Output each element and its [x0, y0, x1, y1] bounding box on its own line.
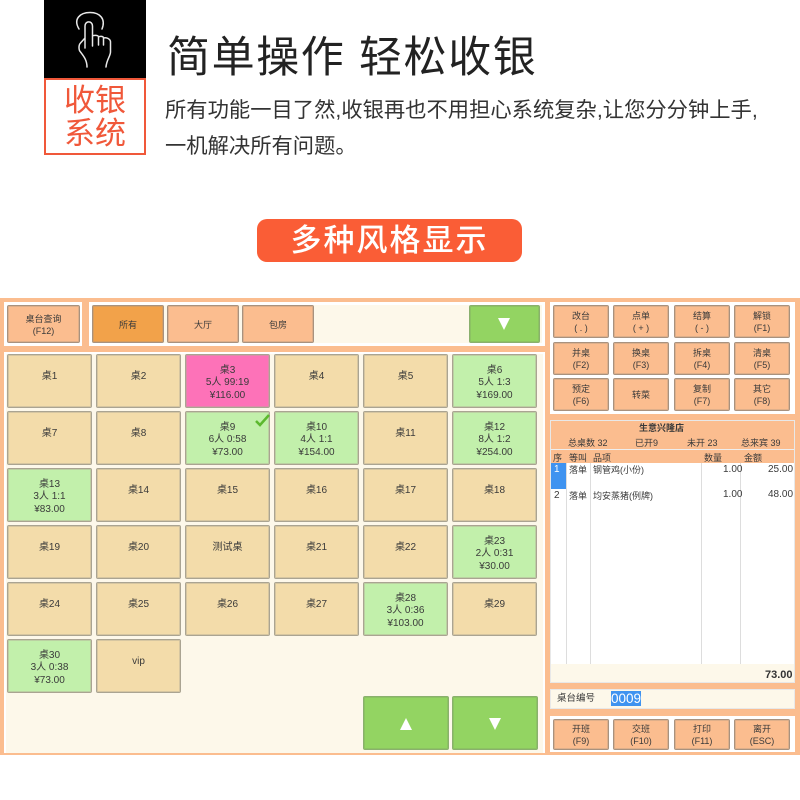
badge label: 收银: [64, 83, 126, 118]
table grid: ¥30.00: [479, 561, 510, 572]
table grid: 桌19: [39, 542, 60, 553]
badge label: 系统: [64, 116, 126, 151]
POS screen: [0, 298, 800, 755]
page up button: [363, 696, 449, 750]
function buttons: (F3): [633, 360, 649, 370]
table grid: 桌24: [39, 599, 60, 610]
table number input: 0009: [611, 691, 641, 706]
table grid: 桌7: [42, 428, 57, 439]
table grid: 桌29: [484, 599, 505, 610]
bottom buttons: [553, 719, 790, 750]
table grid: 桌4: [309, 371, 324, 382]
store summary: 总桌数 32: [568, 438, 608, 448]
function buttons: (F4): [694, 360, 710, 370]
function buttons: ( + ): [633, 323, 649, 333]
description: [165, 98, 758, 158]
table grid: 桌30: [39, 650, 60, 661]
table grid: 桌25: [128, 599, 149, 610]
table grid: ¥116.00: [210, 390, 245, 401]
table grid: ¥154.00: [298, 447, 335, 458]
table grid: 8人 1:2: [478, 434, 511, 445]
tab hall: 大厅: [194, 320, 212, 330]
bottom buttons: (F10): [630, 736, 652, 746]
order table: 等叫: [569, 453, 587, 463]
table grid: 5人 1:3: [478, 377, 511, 388]
table grid: 桌26: [217, 599, 238, 610]
table grid: 桌16: [306, 485, 327, 496]
icon: check mark: [255, 414, 270, 427]
table grid: 桌22: [395, 542, 416, 553]
order table: 钢管鸡(小份): [593, 465, 644, 475]
function buttons: (F5): [754, 360, 770, 370]
tab room: 包房: [269, 320, 287, 330]
order table: 1.00: [723, 464, 742, 475]
function buttons: (F6): [573, 396, 589, 406]
table grid: 桌12: [484, 422, 505, 433]
order table: 25.00: [768, 464, 793, 475]
function buttons: 转菜: [632, 390, 650, 400]
function buttons: 拆桌: [693, 348, 711, 358]
table grid: [7, 354, 537, 693]
tab room: [242, 305, 314, 343]
table grid: 3人 1:1: [33, 491, 66, 502]
bottom buttons: (F9): [573, 736, 589, 746]
section heading pill: 多种风格显示: [290, 223, 488, 258]
bottom buttons: (F11): [692, 736, 712, 746]
table grid: 桌8: [131, 428, 146, 439]
order table: 金额: [744, 453, 762, 463]
table grid: 2人 0:31: [476, 548, 513, 559]
table grid: 4人 1:1: [300, 434, 333, 445]
order table: 48.00: [768, 489, 793, 500]
table grid: 桌17: [395, 485, 416, 496]
table grid: 桌20: [128, 542, 149, 553]
order table: 落单: [569, 491, 587, 501]
table grid: 5人 99:19: [206, 377, 249, 388]
store summary: 未开 23: [687, 438, 718, 448]
order table: 1: [554, 464, 560, 475]
order receipt: [551, 423, 794, 681]
table grid: 测试桌: [212, 542, 242, 553]
table search button: (F12): [33, 326, 54, 336]
function buttons: ( . ): [574, 323, 588, 333]
table grid: 3人 0:36: [387, 605, 424, 616]
tab all: [92, 305, 164, 343]
order table: 均安蒸猪(例牌): [593, 491, 653, 501]
table grid: ¥73.00: [212, 447, 243, 458]
area tabs: [92, 305, 314, 343]
bottom buttons: (ESC): [750, 736, 774, 746]
function buttons: 改台: [572, 311, 590, 321]
table grid: 桌15: [217, 485, 238, 496]
function buttons: (F1): [754, 323, 770, 333]
function buttons: (F8): [754, 396, 770, 406]
tab hall: [167, 305, 239, 343]
store summary: 总来宾 39: [741, 438, 781, 448]
function buttons: 换桌: [632, 348, 650, 358]
store summary: 已开9: [635, 438, 658, 448]
function buttons: ( - ): [695, 323, 709, 333]
table grid: 桌11: [395, 428, 416, 439]
table grid: 桌18: [484, 485, 505, 496]
page down button: [452, 696, 538, 750]
table grid: 桌1: [42, 371, 57, 382]
badge label: [44, 78, 146, 155]
function buttons: [553, 305, 790, 411]
store summary: [551, 421, 794, 450]
function buttons: 预定: [572, 384, 590, 394]
function buttons: 解锁: [753, 311, 771, 321]
table grid: 桌21: [306, 542, 327, 553]
section heading pill: [257, 219, 522, 262]
table grid: 桌9: [220, 422, 235, 433]
order table: 落单: [569, 465, 587, 475]
table grid: 桌10: [306, 422, 327, 433]
table grid: vip: [132, 656, 145, 667]
tab all: 所有: [119, 320, 137, 330]
bottom buttons: 交班: [632, 724, 650, 734]
title: 简单操作 轻松收银: [167, 34, 537, 82]
function buttons: 清桌: [753, 348, 771, 358]
function buttons: 其它: [753, 384, 771, 394]
table grid: 桌13: [39, 479, 60, 490]
table grid: 桌5: [398, 371, 413, 382]
table grid: 桌6: [487, 365, 502, 376]
description: 一机解决所有问题。: [165, 134, 357, 158]
table grid: ¥83.00: [34, 504, 65, 515]
bottom buttons: 开班: [572, 724, 590, 734]
table grid: 桌27: [306, 599, 327, 610]
order table: [551, 453, 793, 681]
page down button top: [469, 305, 540, 343]
function buttons: (F2): [573, 360, 589, 370]
order table: 品项: [593, 453, 611, 463]
table grid: ¥103.00: [387, 618, 424, 629]
table grid: ¥254.00: [476, 447, 513, 458]
table number input: [557, 691, 641, 706]
store summary: 生意兴隆店: [639, 423, 684, 433]
table grid: 3人 0:38: [31, 662, 68, 673]
order table: 数量: [704, 453, 722, 463]
order table: 序: [553, 453, 562, 463]
order table: 2: [554, 490, 560, 501]
function buttons: 点单: [632, 311, 650, 321]
table search button: 桌台查询: [25, 314, 62, 324]
function buttons: 并桌: [572, 348, 590, 358]
table grid: 桌14: [128, 485, 149, 496]
table grid: 桌28: [395, 593, 416, 604]
table grid: 桌23: [484, 536, 505, 547]
table grid: ¥73.00: [34, 675, 65, 686]
table grid: 6人 0:58: [209, 434, 246, 445]
order table: 1.00: [723, 489, 742, 500]
table number input: 桌台编号: [557, 693, 595, 704]
logo badge: [44, 0, 146, 155]
order table: 73.00: [765, 669, 793, 681]
table search button: [7, 305, 80, 343]
table grid: 桌3: [220, 365, 235, 376]
icon: tapping hand: [44, 0, 146, 78]
table grid: ¥169.00: [476, 390, 513, 401]
bottom buttons: 离开: [753, 724, 771, 734]
bottom buttons: 打印: [693, 724, 711, 734]
function buttons: 复制: [693, 384, 711, 394]
function buttons: 结算: [693, 311, 711, 321]
description: 所有功能一目了然,收银再也不用担心系统复杂,让您分分钟上手,: [165, 98, 758, 122]
table grid: 桌2: [131, 371, 146, 382]
function buttons: (F7): [694, 396, 710, 406]
